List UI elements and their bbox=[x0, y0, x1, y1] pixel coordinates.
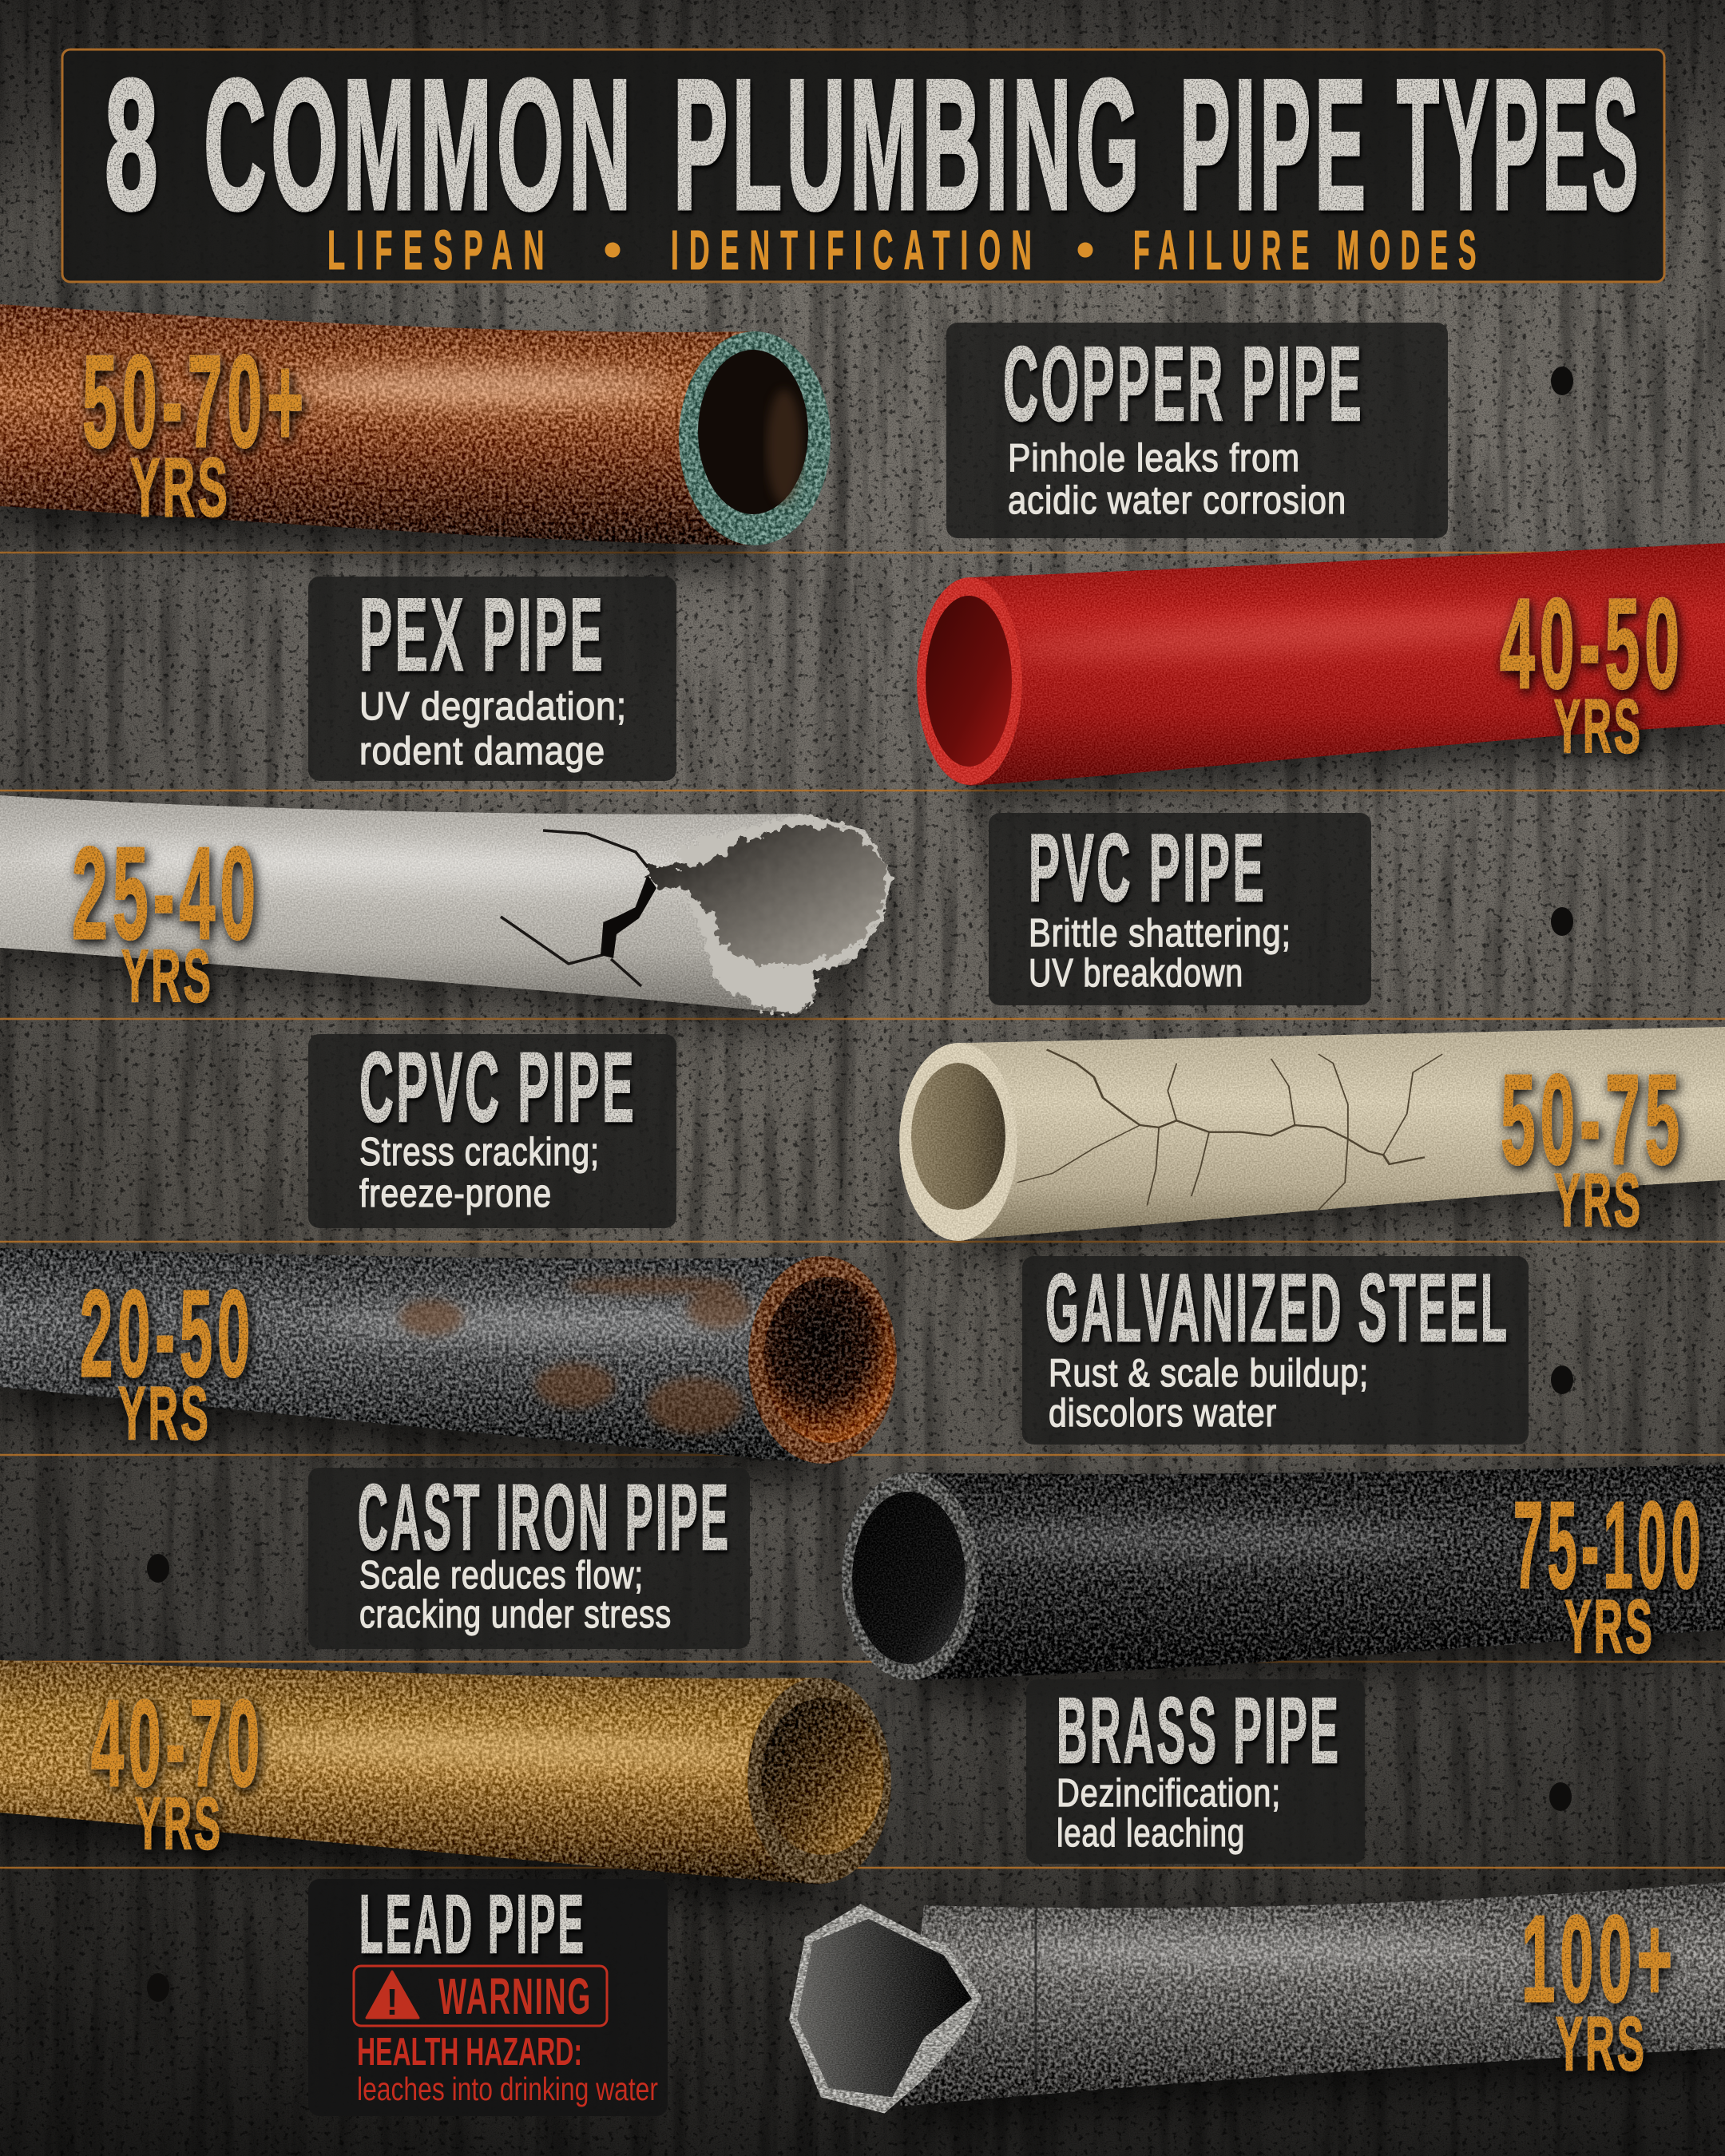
subtitle bbox=[327, 219, 1486, 281]
main title: 8 bbox=[105, 42, 163, 248]
text: 20-50 bbox=[80, 1265, 255, 1402]
lifespan: galvanized bbox=[80, 1265, 255, 1455]
lifespan: brass: YRS bbox=[135, 1783, 223, 1865]
pipe: PEX red bbox=[917, 543, 1725, 810]
text: 40-70 bbox=[91, 1674, 264, 1812]
lifespan: brass bbox=[91, 1674, 264, 1865]
failure mode: PEX: rodent damage bbox=[359, 730, 605, 773]
lifespan: CPVC bbox=[1501, 1048, 1684, 1242]
panel: CPVC pipe bbox=[308, 1033, 676, 1228]
warning badge: ! bbox=[386, 1981, 399, 2023]
panel: PVC pipe bbox=[989, 813, 1371, 1005]
failure mode: galvanized bbox=[1049, 1352, 1369, 1435]
failure mode: cast iron bbox=[359, 1554, 672, 1636]
pipe: PVC white cracked bbox=[0, 795, 892, 1034]
text: BRASS PIPE bbox=[1057, 1678, 1341, 1782]
cracks bbox=[1017, 1049, 1442, 1210]
warning badge bbox=[354, 1966, 607, 2026]
failure mode: copper: Pinhole leaks from bbox=[1008, 437, 1300, 480]
main title: PIPE bbox=[1180, 42, 1370, 248]
panel: cast iron pipe bbox=[308, 1465, 750, 1649]
failure mode: copper: acidic water corrosion bbox=[1008, 479, 1346, 522]
panel: galvanized steel bbox=[1022, 1254, 1529, 1445]
header panel bbox=[62, 42, 1664, 282]
failure mode: brass: Dezincification; bbox=[1057, 1772, 1281, 1815]
warning badge: WARNING bbox=[438, 1968, 592, 2025]
panel: copper pipe bbox=[946, 323, 1448, 538]
lifespan: PVC bbox=[72, 820, 260, 1017]
subtitle: IDENTIFICATION bbox=[671, 219, 1042, 281]
pipe: copper bbox=[0, 304, 831, 573]
failure mode: cast iron: cracking under stress bbox=[359, 1593, 672, 1636]
text: 50-70+ bbox=[82, 328, 308, 474]
failure mode: CPVC bbox=[359, 1131, 600, 1215]
panel: lead pipe bbox=[308, 1878, 668, 2116]
text: 25-40 bbox=[72, 820, 260, 966]
text: CAST IRON PIPE bbox=[358, 1465, 731, 1569]
failure mode: CPVC: Stress cracking; bbox=[359, 1131, 600, 1174]
failure mode: PEX bbox=[359, 685, 627, 773]
main title: COMMON bbox=[204, 42, 636, 248]
pipe: CPVC beige bbox=[899, 1027, 1725, 1261]
failure mode: copper bbox=[1008, 437, 1346, 522]
pipe: galvanized steel bbox=[0, 1248, 897, 1491]
lifespan: lead: YRS bbox=[1556, 2002, 1647, 2087]
lead rim and hole bbox=[789, 1904, 981, 2114]
main title bbox=[105, 42, 1642, 248]
failure mode: PVC: UV breakdown bbox=[1029, 952, 1243, 995]
main title: PLUMBING bbox=[673, 42, 1144, 248]
failure mode: brass bbox=[1057, 1772, 1281, 1855]
lifespan: copper: YRS bbox=[130, 442, 230, 534]
lifespan: lead bbox=[1521, 1890, 1677, 2087]
panel: CPVC pipe: CPVC PIPE bbox=[359, 1033, 636, 1143]
failure mode: cast iron: Scale reduces flow; bbox=[359, 1554, 644, 1597]
health hazard text: HEALTH HAZARD: bbox=[357, 2031, 582, 2074]
lifespan: PVC: YRS bbox=[121, 934, 213, 1017]
panel: PEX pipe: PEX PIPE bbox=[359, 577, 605, 692]
lifespan: cast iron bbox=[1513, 1476, 1705, 1668]
lifespan: PEX: YRS bbox=[1554, 684, 1643, 769]
panel: lead pipe: LEAD PIPE bbox=[359, 1878, 586, 1970]
failure mode: galvanized: Rust & scale buildup; bbox=[1049, 1352, 1369, 1395]
panel: PEX pipe bbox=[308, 577, 676, 781]
failure mode: PVC bbox=[1029, 912, 1291, 995]
failure mode: PVC: Brittle shattering; bbox=[1029, 912, 1291, 955]
pipe: brass bbox=[0, 1660, 891, 1910]
health hazard text: leaches into drinking water bbox=[357, 2071, 658, 2107]
pipe: lead bbox=[789, 1882, 1725, 2129]
form-tie holes in wall bbox=[147, 367, 1573, 2002]
failure mode: brass: lead leaching bbox=[1057, 1812, 1245, 1855]
subtitle: LIFESPAN bbox=[327, 219, 555, 281]
lifespan: copper bbox=[82, 328, 308, 534]
lifespan: PEX bbox=[1500, 572, 1684, 769]
failure mode: CPVC: freeze-prone bbox=[359, 1172, 552, 1215]
panel: PVC pipe: PVC PIPE bbox=[1029, 814, 1267, 921]
failure mode: PEX: UV degradation; bbox=[359, 685, 627, 728]
health hazard text bbox=[357, 2031, 658, 2107]
lifespan: galvanized: YRS bbox=[118, 1371, 211, 1455]
lifespan: CPVC: YRS bbox=[1554, 1158, 1643, 1242]
failure mode: galvanized: discolors water bbox=[1049, 1392, 1277, 1435]
panel: brass pipe bbox=[1026, 1678, 1365, 1864]
pipe: cast iron bbox=[842, 1464, 1725, 1702]
